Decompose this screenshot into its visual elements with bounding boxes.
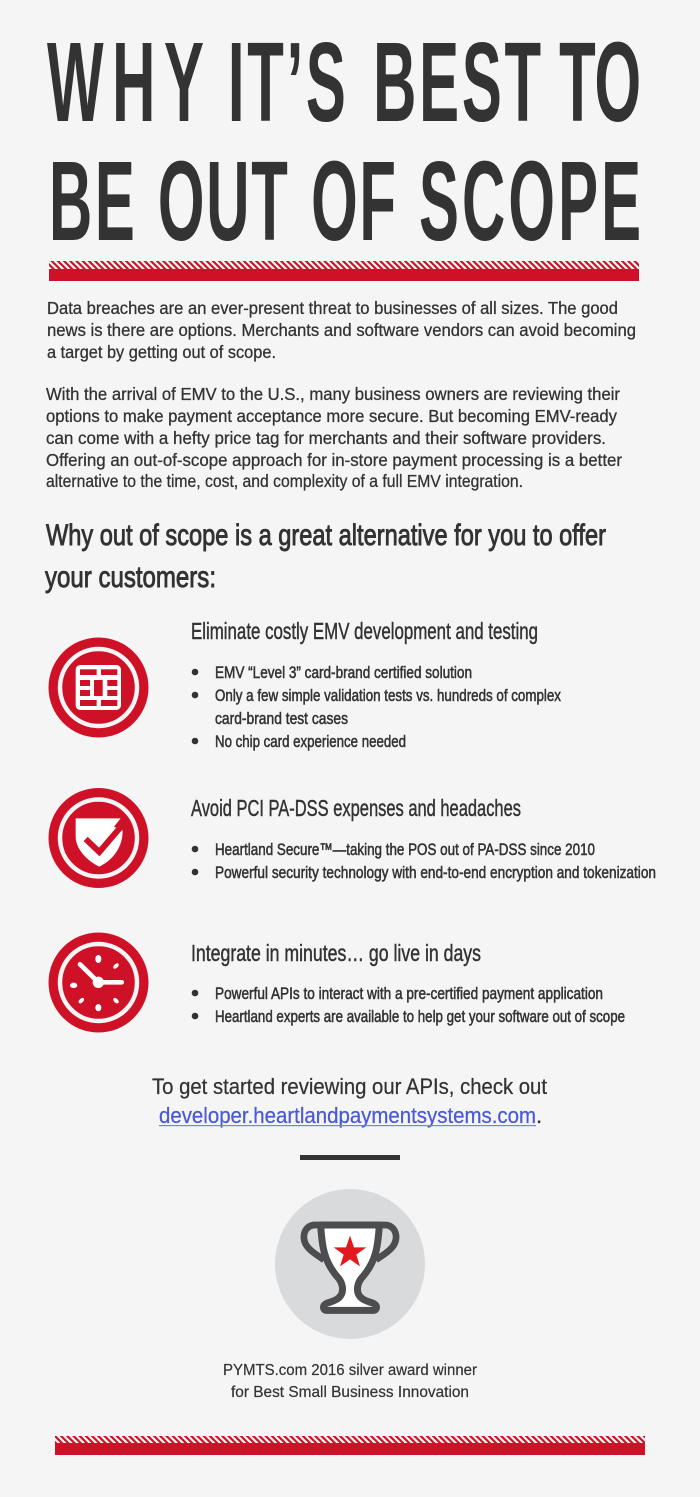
icon: shield with check bbox=[48, 788, 148, 888]
item 3 bullets bbox=[192, 984, 625, 1026]
title: IT’S bbox=[228, 20, 346, 146]
item 1 heading: Eliminate costly EMV development and testing bbox=[191, 618, 538, 644]
bottom red hatched bar bbox=[55, 1436, 645, 1455]
award caption: PYMTS.com 2016 silver award winner bbox=[223, 1362, 477, 1379]
intro paragraph 2: alternative to the time, cost, and complexity of a full EMV integration. bbox=[46, 471, 523, 491]
title bbox=[47, 20, 641, 265]
item 1 bullets: card-brand test cases bbox=[215, 709, 348, 728]
divider bbox=[300, 1155, 400, 1160]
item 2 heading: Avoid PCI PA-DSS expenses and headaches bbox=[191, 795, 521, 821]
icon: clock bbox=[48, 932, 148, 1032]
item 1 bullets bbox=[192, 663, 561, 751]
title: OF bbox=[311, 139, 396, 265]
title: SCOPE bbox=[419, 139, 641, 265]
award caption bbox=[223, 1362, 477, 1401]
item 3 bullets: Powerful APIs to interact with a pre-certified payment application bbox=[215, 984, 603, 1003]
intro paragraph 2: can come with a hefty price tag for merchants and their software providers. bbox=[46, 428, 606, 448]
title: BEST bbox=[373, 20, 541, 146]
section heading: your customers: bbox=[45, 561, 216, 594]
award caption: for Best Small Business Innovation bbox=[231, 1384, 469, 1401]
icon: trophy badge bbox=[275, 1189, 425, 1339]
intro paragraph 1: news is there are options. Merchants and software vendors can avoid becoming bbox=[47, 320, 636, 340]
intro paragraph 1: a target by getting out of scope. bbox=[47, 342, 276, 362]
intro paragraph 1: Data breaches are an ever-present threat to businesses of all sizes. The good bbox=[47, 298, 618, 318]
title: WHY bbox=[47, 20, 204, 146]
title: OUT bbox=[158, 139, 288, 265]
intro paragraph 2: With the arrival of EMV to the U.S., many business owners are reviewing their bbox=[46, 384, 620, 404]
call to action: developer.heartlandpaymentsystems.com bbox=[159, 1103, 536, 1128]
item 1 bullets: EMV “Level 3” card-brand certified solution bbox=[215, 663, 472, 682]
title: TO bbox=[559, 20, 641, 146]
icon: chip card bbox=[48, 638, 148, 738]
intro paragraph 2: Offering an out-of-scope approach for in-store payment processing is a better bbox=[46, 450, 622, 470]
call to action: . bbox=[536, 1103, 542, 1128]
section heading bbox=[45, 519, 606, 594]
item 1 bullets: No chip card experience needed bbox=[215, 732, 406, 751]
call to action bbox=[152, 1074, 547, 1128]
call to action: To get started reviewing our APIs, check out bbox=[152, 1074, 547, 1099]
item 3 heading: Integrate in minutes… go live in days bbox=[191, 940, 481, 966]
item 2 bullets: Heartland Secure™—taking the POS out of PA-DSS since 2010 bbox=[215, 840, 595, 859]
item 2 bullets bbox=[192, 840, 656, 882]
title: BE bbox=[49, 139, 135, 265]
intro paragraph 1 bbox=[47, 298, 636, 362]
intro paragraph 2 bbox=[46, 384, 622, 491]
top red hatched bar bbox=[49, 261, 639, 281]
item 1 bullets: Only a few simple validation tests vs. hundreds of complex bbox=[215, 686, 561, 705]
intro paragraph 2: options to make payment acceptance more secure. But becoming EMV-ready bbox=[46, 406, 617, 426]
